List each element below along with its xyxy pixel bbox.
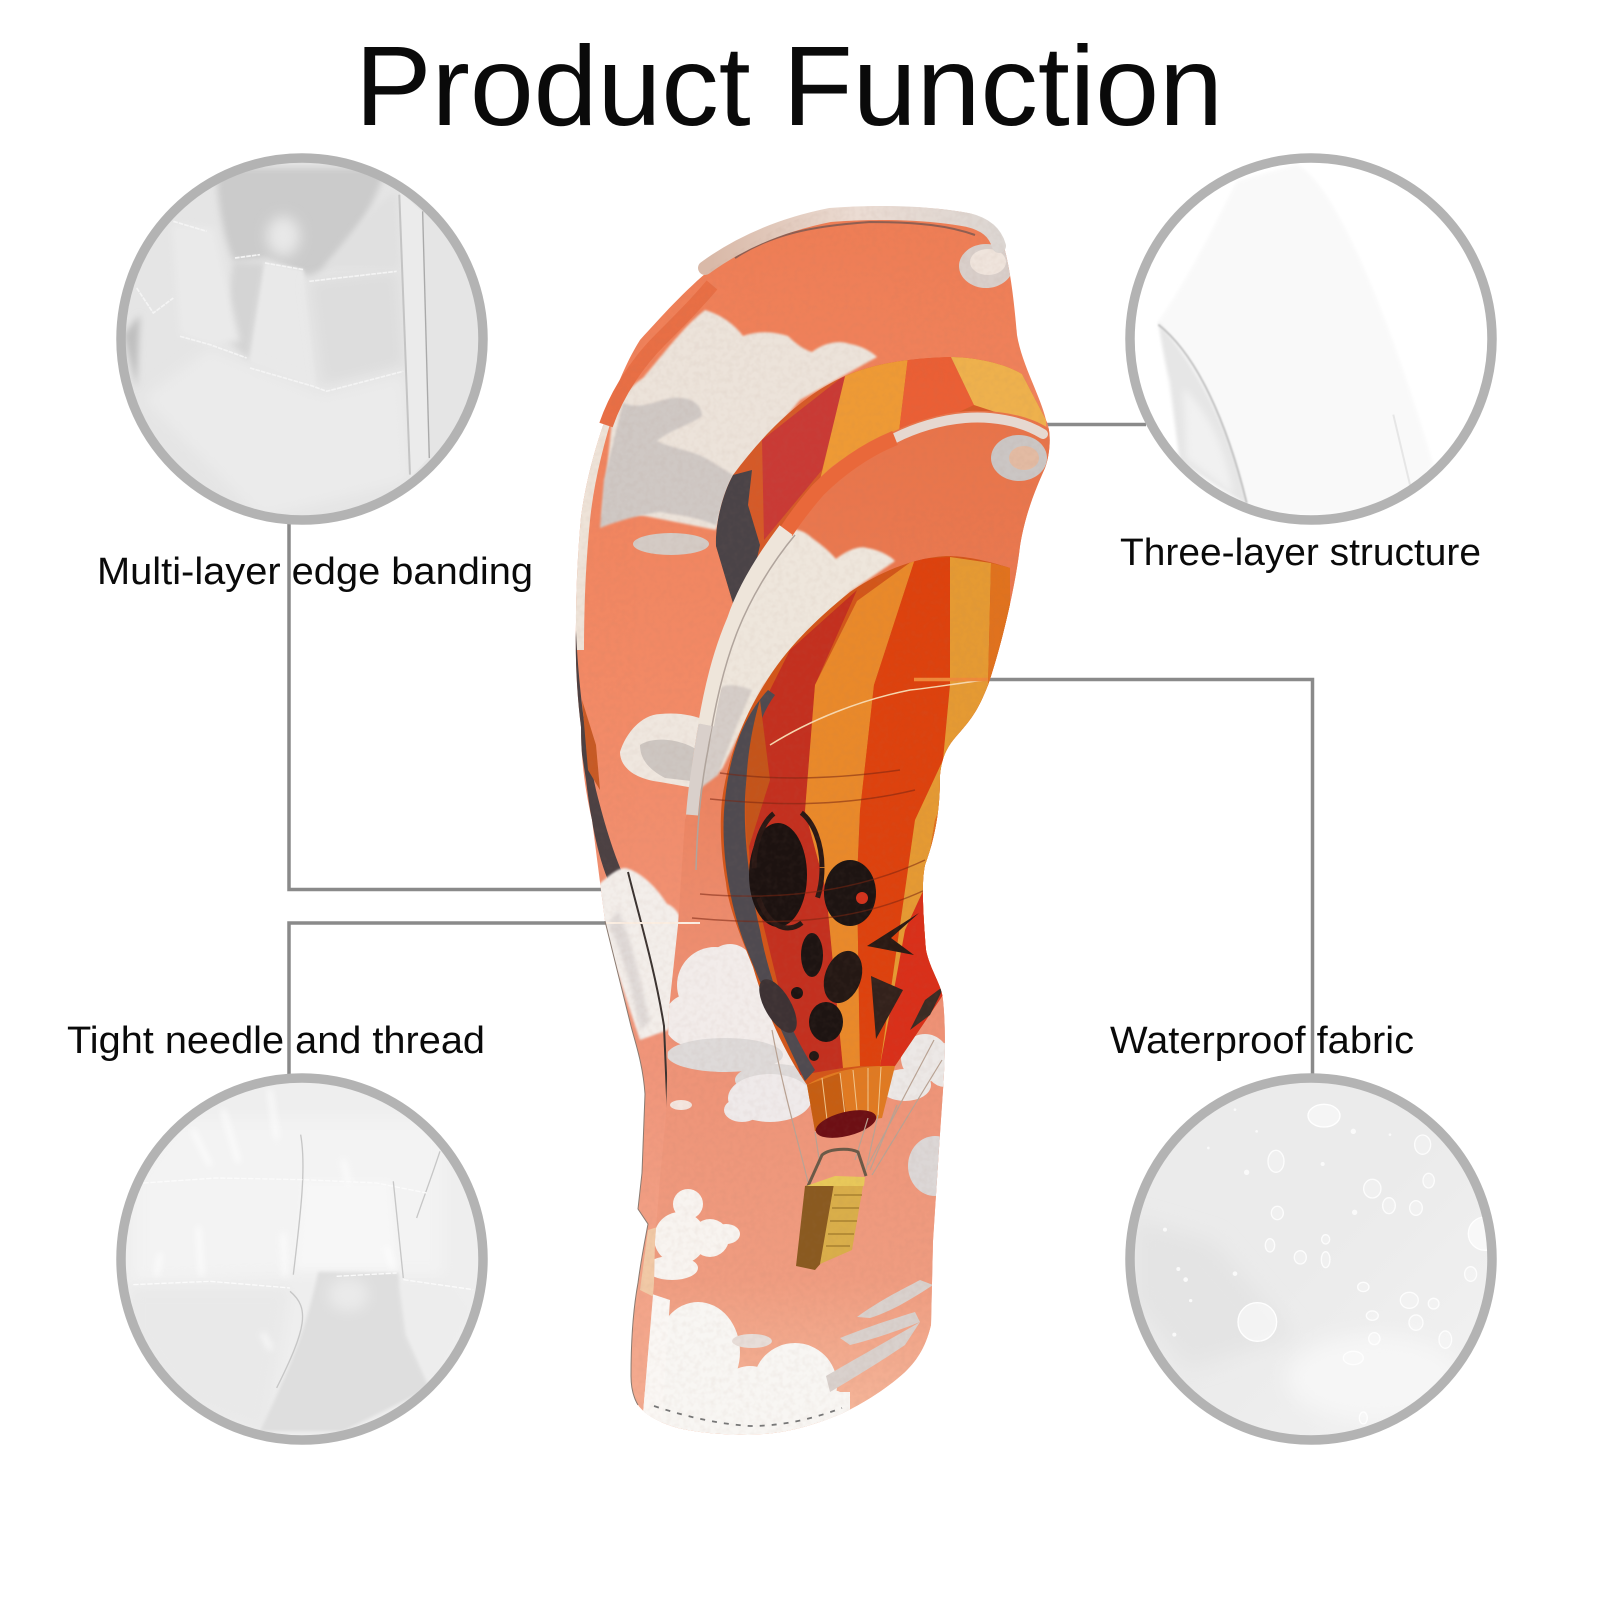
detail circle: tight needle and thread <box>110 1068 494 1452</box>
right mid cloud <box>887 1034 945 1101</box>
right band <box>400 191 428 478</box>
left shade <box>1133 1218 1293 1368</box>
left lower shadow <box>608 910 650 1030</box>
left sliver balloon <box>576 630 621 879</box>
skirt dark panels <box>807 1073 848 1131</box>
fold nose highlight <box>267 216 300 256</box>
front rim seam <box>696 535 795 870</box>
right bright fold <box>400 1281 470 1385</box>
stitch seams <box>137 221 403 391</box>
top rim binding <box>705 213 999 268</box>
lower lobe cloud <box>724 1074 812 1122</box>
oval decal <box>801 933 823 977</box>
front rim cream <box>706 530 786 725</box>
title: Product Function <box>355 23 1223 149</box>
back balloon red orange stripe <box>899 357 974 428</box>
detail circle: three-layer structure <box>1130 158 1492 520</box>
large dark oval <box>749 823 807 927</box>
skirt mouth <box>813 1105 879 1143</box>
label: multi-layer edge banding: Multi-layer edge banding <box>97 551 533 593</box>
butterfly decal <box>809 1002 843 1042</box>
mid left cloud shadow <box>640 740 694 781</box>
main balloon red stripe <box>857 557 950 1066</box>
balloon skirt <box>807 1066 895 1143</box>
large droplet <box>1238 1303 1277 1341</box>
streak clouds <box>826 1280 933 1392</box>
lower big cloud <box>668 944 795 1072</box>
right crease <box>1393 415 1410 485</box>
central shadow <box>223 261 265 361</box>
gloss marks <box>157 1091 393 1348</box>
top right cloud <box>959 244 1013 288</box>
main balloon far stripe <box>895 563 1020 1066</box>
main balloon <box>700 540 1020 1090</box>
right low cloud <box>908 1136 940 1196</box>
top right cloud highlight <box>970 249 1006 275</box>
front rim binding <box>692 418 1043 870</box>
fabric shape <box>1158 165 1433 515</box>
infographic canvas <box>68 43 1497 1445</box>
lower left cloud <box>646 1189 740 1280</box>
right fold highlight <box>323 191 400 268</box>
main balloon amber stripe <box>880 557 991 1066</box>
bright centre fold <box>297 1181 397 1268</box>
label: tight needle and thread: Tight needle and thread <box>67 1020 485 1062</box>
product: golf club head cover <box>570 200 1060 1450</box>
flower decal centre <box>856 892 868 904</box>
basket light side <box>820 1178 864 1264</box>
basket frame <box>808 1149 866 1186</box>
dark leaf left <box>752 974 804 1038</box>
connector: multi-layer edge banding <box>289 524 601 890</box>
right pocket <box>310 271 403 385</box>
bottom left tan fold <box>640 1228 656 1296</box>
grey dent patch <box>260 1271 430 1431</box>
leaf decal <box>817 945 869 1009</box>
top rim dark gap <box>735 222 975 258</box>
skirt panel lines <box>822 1067 881 1128</box>
dark oval ring <box>754 808 822 928</box>
front cloud grey lower <box>694 684 752 790</box>
cover silhouette <box>576 206 1050 1435</box>
seam dark line <box>628 872 668 1120</box>
triangle decal <box>871 976 903 1039</box>
left sliver balloon orange <box>582 700 600 790</box>
crease lines <box>277 1135 440 1388</box>
bottom right sheen <box>1287 1335 1460 1421</box>
main balloon left red stripe <box>745 590 857 1075</box>
mid left cloud <box>620 713 705 790</box>
back balloon <box>716 357 1046 603</box>
balloon ropes <box>772 1030 942 1182</box>
back balloon red stripe <box>762 374 846 540</box>
balloon decal blobs <box>749 808 945 1061</box>
basket weave <box>826 1195 862 1246</box>
orange rim shade <box>606 285 712 425</box>
silhouette outline on lower left <box>605 921 648 1405</box>
back panel artwork <box>572 244 1060 1300</box>
white band across seam <box>606 922 700 924</box>
band orange inner <box>746 700 770 850</box>
detail circle: waterproof fabric <box>1120 1068 1504 1452</box>
front panel <box>606 410 1050 1435</box>
left fold <box>172 225 240 345</box>
tiny cloud <box>732 1334 772 1348</box>
back balloon amber stripe <box>951 357 1046 427</box>
left lower grey <box>130 1288 290 1435</box>
back cloud cream <box>602 310 877 530</box>
back balloon dark band <box>716 470 760 610</box>
detail circle: multi-layer edge banding <box>110 148 494 532</box>
small droplets <box>1265 1135 1477 1424</box>
basket rim <box>806 1176 865 1186</box>
leather grain overlay <box>570 200 1060 1440</box>
seam line <box>1158 325 1247 503</box>
right band shadow line <box>423 211 429 458</box>
arrow decal <box>867 913 919 955</box>
connector: three-layer structure <box>1046 423 1146 426</box>
left edge shade <box>123 315 140 388</box>
crescent highlight <box>1183 388 1233 495</box>
flower decal <box>824 860 876 926</box>
bottom hem stitches <box>654 1406 842 1426</box>
white band on lower left <box>643 1294 670 1422</box>
orange thin highlight <box>770 680 985 745</box>
front top right cloud center <box>1009 446 1039 470</box>
center fold <box>250 263 317 388</box>
small cloud dash <box>670 1100 692 1110</box>
bottom big clouds <box>643 1302 850 1434</box>
dent bump <box>328 1278 368 1311</box>
back cloud shadow <box>600 398 733 528</box>
crescent shade <box>1158 321 1247 505</box>
top droplet <box>1308 1104 1340 1127</box>
basket dark side <box>796 1178 835 1270</box>
front rim grey lower <box>692 725 706 815</box>
connector: waterproof fabric <box>985 680 1312 1076</box>
lower right red panel <box>880 865 960 1066</box>
label: waterproof fabric: Waterproof fabric <box>1110 1020 1414 1062</box>
front top right cloud <box>991 435 1047 481</box>
basket <box>796 1149 866 1270</box>
lower light cloth <box>143 348 410 518</box>
label: three-layer structure: Three-layer structure <box>1120 532 1481 574</box>
orange connector overlap <box>914 678 988 681</box>
top dark fold <box>217 168 387 276</box>
stitch seams <box>133 1178 473 1290</box>
left cream edge <box>576 424 610 650</box>
front rim orange <box>786 438 895 532</box>
small dot <box>809 1051 819 1061</box>
back balloon orange stripe <box>820 357 908 480</box>
front cream cloud <box>692 528 896 773</box>
connector: tight needle and thread <box>289 923 608 1076</box>
right edge decal <box>910 985 945 1030</box>
right edge droplet <box>1468 1217 1502 1250</box>
main balloon orange stripe <box>805 559 915 1068</box>
balloon dark band <box>724 690 815 1081</box>
lower big cloud shadow <box>668 1038 808 1087</box>
tiny dots <box>1163 1108 1391 1337</box>
band left shadow <box>399 195 410 475</box>
stitch lines across balloon <box>692 770 925 922</box>
white lower left clouds <box>600 866 679 1041</box>
small grey cloud <box>633 533 709 555</box>
dot decal <box>791 987 803 999</box>
upper bright cloth <box>133 1118 443 1281</box>
